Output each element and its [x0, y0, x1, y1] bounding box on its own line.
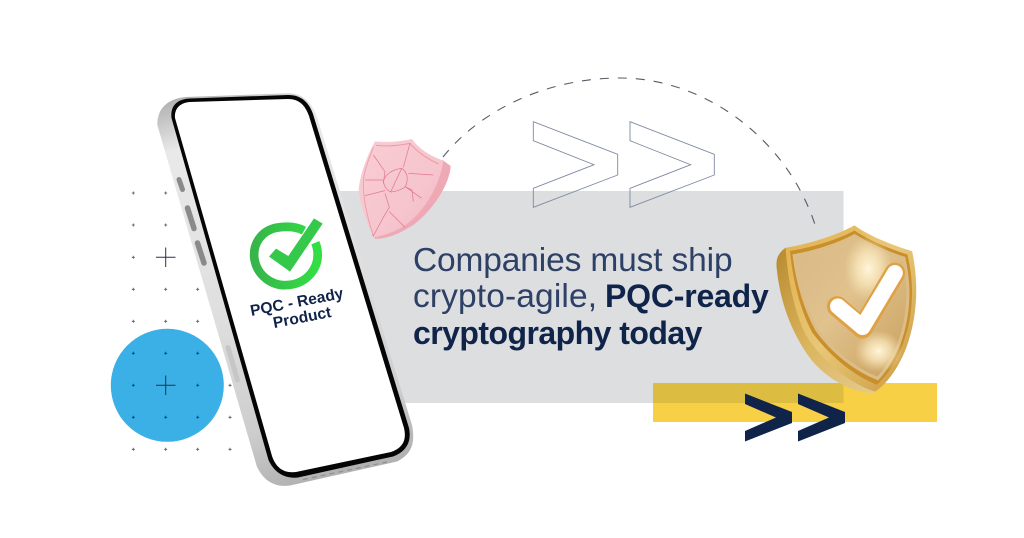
- shield cracks: [363, 143, 439, 236]
- shield check mark: [837, 273, 895, 328]
- phone label: PQC - Ready: [249, 285, 345, 320]
- icon: cracked pink shield: [359, 139, 451, 239]
- headline: PQC-ready: [605, 278, 769, 314]
- headline: Companies must ship: [413, 242, 732, 279]
- dashed arc: [443, 78, 817, 231]
- phone black bezel: [171, 95, 410, 478]
- outlined double chevrons: [533, 122, 714, 207]
- phone white screen: [175, 99, 405, 472]
- headline: [413, 242, 769, 351]
- phone bottom speaker holes: [303, 462, 387, 480]
- headline: crypto-agile,: [413, 278, 597, 315]
- blue circle: [111, 329, 224, 442]
- phone silver body: [157, 93, 413, 486]
- phone: [157, 93, 413, 486]
- gold shield inner groove: [790, 231, 912, 385]
- icon: green check ring: [254, 218, 323, 285]
- gold shield rim: [786, 225, 916, 392]
- gold shield face: [794, 236, 908, 379]
- shield face: [359, 139, 443, 237]
- grid marks on circle: [132, 352, 199, 419]
- dot grid: [132, 192, 232, 451]
- icon: gold shield: [776, 225, 916, 393]
- headline: cryptography today: [413, 315, 703, 351]
- shield thick edge: [372, 160, 451, 239]
- grey text panel: [335, 191, 844, 403]
- phone label: Product: [272, 304, 333, 332]
- grey panel overlap on yellow band: [653, 383, 844, 403]
- gold shield side: [776, 248, 882, 393]
- navy double chevrons: [745, 394, 845, 442]
- phone side buttons: [179, 180, 204, 263]
- yellow band: [653, 383, 937, 422]
- large plus marks: [156, 248, 176, 395]
- shine highlights: [844, 236, 892, 301]
- phone lower side button: [228, 348, 238, 380]
